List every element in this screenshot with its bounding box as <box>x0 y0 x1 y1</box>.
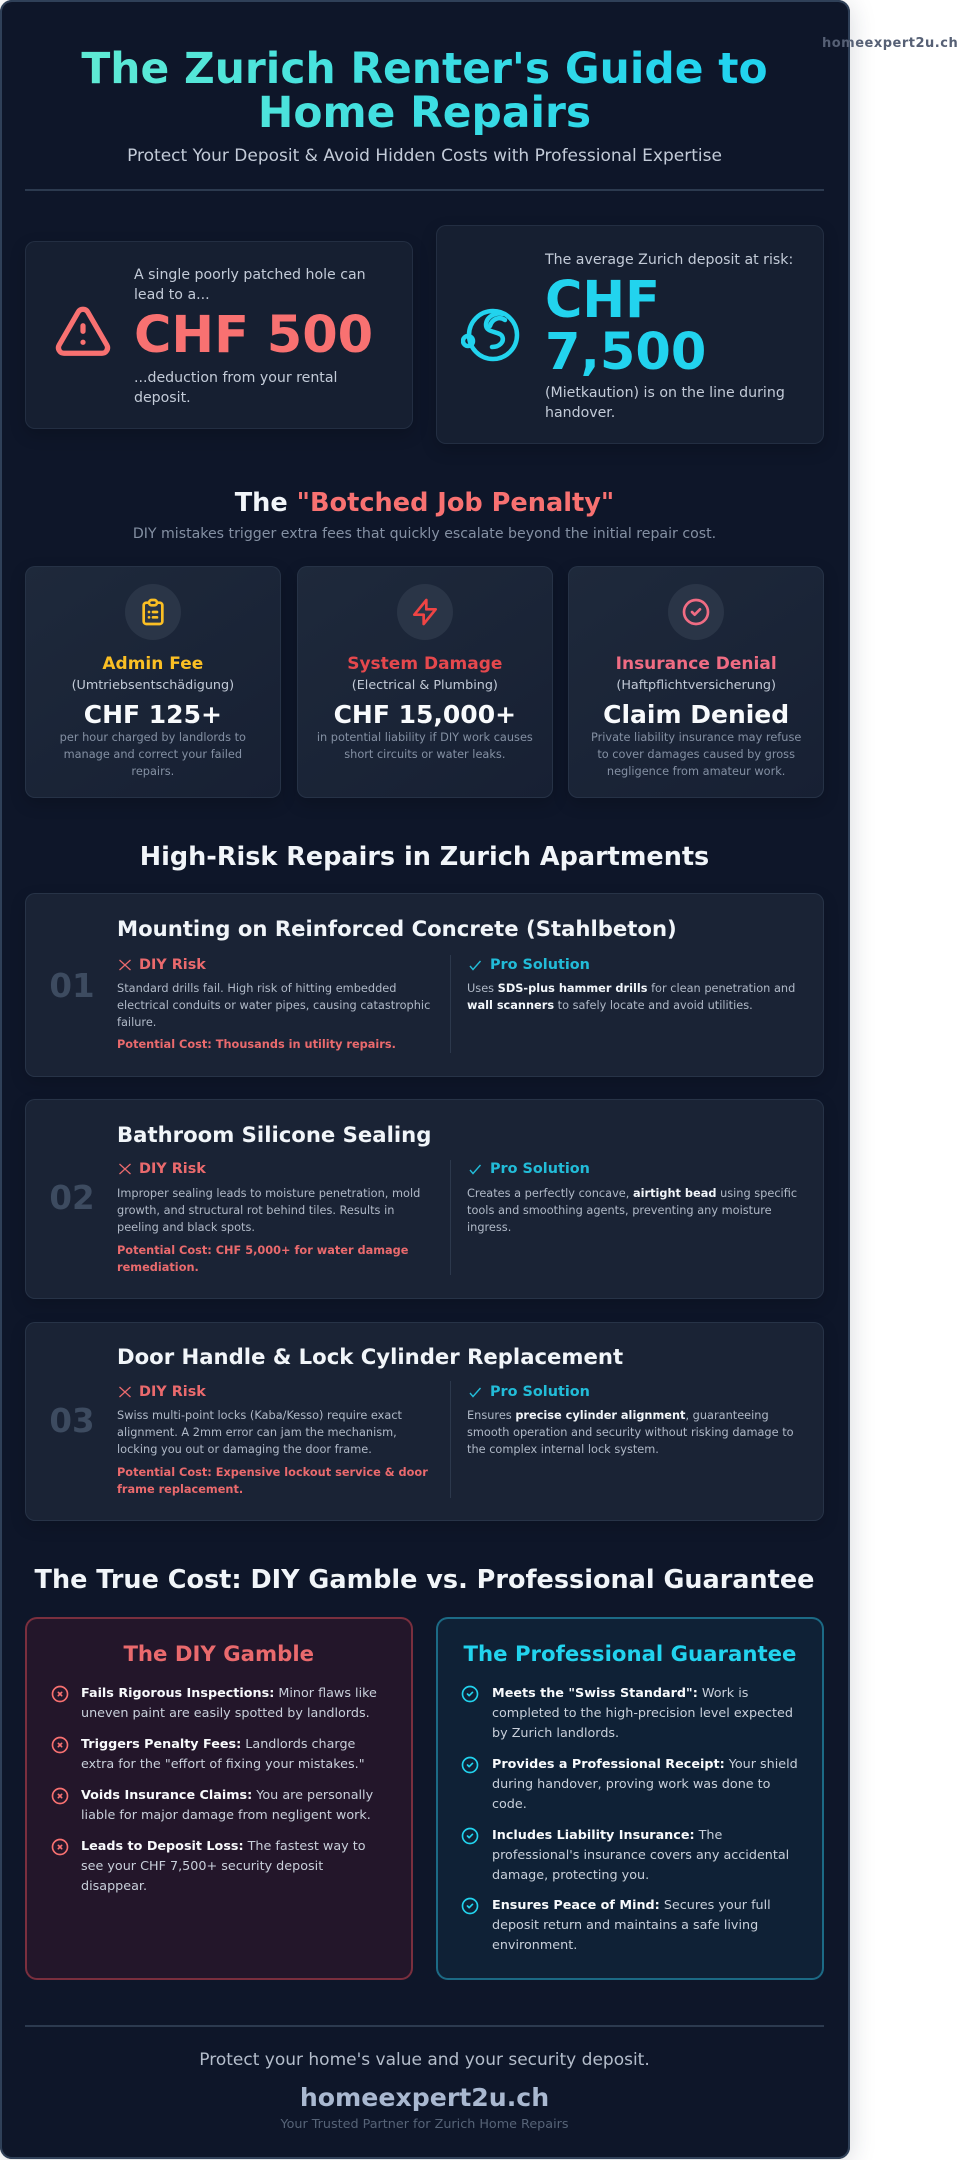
card description: short circuits or water leaks. <box>344 746 505 760</box>
card title: Insurance Denial <box>616 654 777 674</box>
stat card: CHF 500 deduction <box>25 241 412 429</box>
heading: high-risk repairs: High-Risk Repairs in Zurich Apartments <box>140 842 709 872</box>
pro solution text <box>467 1408 794 1456</box>
watermark: homeexpert2u.ch <box>822 36 958 51</box>
icon: warning triangle <box>56 306 110 356</box>
title <box>25 47 824 135</box>
stat caption: (Mietkaution) is on the line during <box>545 385 785 401</box>
icon: x circle <box>52 1838 68 1856</box>
DIY risk text <box>117 1186 420 1234</box>
list item: Leads to Deposit Loss: The fastest way to <box>81 1839 366 1854</box>
repair title: Mounting on Reinforced Concrete (Stahlbeton) <box>117 916 677 941</box>
potential cost: frame replacement. <box>117 1482 243 1496</box>
stat caption <box>134 370 337 406</box>
title: Home Repairs <box>258 88 591 137</box>
subtitle: Protect Your Deposit & Avoid Hidden Costs with Professional Expertise <box>127 146 722 166</box>
DIY risk text: Improper sealing leads to moisture penetration, mold <box>117 1186 420 1200</box>
list item: liable for major damage from negligent work. <box>81 1808 371 1823</box>
list item <box>492 1686 793 1741</box>
list item: extra for the "effort of fixing your mistakes." <box>81 1757 365 1772</box>
panel: the DIY gamble <box>25 1617 412 1980</box>
list item: Ensures Peace of Mind: Secures your full <box>492 1898 771 1913</box>
icon: check circle <box>462 1686 478 1702</box>
card value: CHF 15,000+ <box>334 700 516 729</box>
card description <box>60 730 246 778</box>
icon: dollar coin <box>461 308 520 362</box>
list item: disappear. <box>81 1879 147 1894</box>
card description: per hour charged by landlords to <box>60 730 246 744</box>
potential cost: Potential Cost: CHF 5,000+ for water damage <box>117 1242 408 1256</box>
DIY risk text <box>117 980 430 1028</box>
list item: Includes Liability Insurance: The <box>492 1828 722 1843</box>
pro solution label: Pro Solution <box>490 1161 590 1177</box>
DIY risk text: peeling and black spots. <box>117 1220 255 1234</box>
pro solution text: Uses SDS-plus hammer drills for clean penetration and <box>467 980 795 994</box>
potential cost: Potential Cost: Thousands in utility repairs. <box>117 1036 396 1050</box>
stat caption: handover. <box>545 405 615 421</box>
penalty card: admin fee <box>25 566 281 798</box>
list item: by Zurich landlords. <box>492 1726 619 1741</box>
pro solution text: Creates a perfectly concave, airtight bead using specific <box>467 1186 797 1200</box>
pro solution text: wall scanners to safely locate and avoid utilities. <box>467 998 753 1012</box>
icon: check circle <box>462 1756 478 1774</box>
repair title: Bathroom Silicone Sealing <box>117 1122 431 1147</box>
DIY risk text: alignment. A 2mm error can jam the mechanism, <box>117 1424 397 1438</box>
card title: Admin Fee <box>102 654 203 674</box>
column title: The DIY Gamble <box>123 1642 314 1667</box>
list item <box>492 1757 798 1812</box>
heading: botched job penalty: The "Botched Job Penalty" <box>235 488 614 518</box>
DIY risk text: failure. <box>117 1014 156 1028</box>
list item <box>492 1828 789 1883</box>
footer tagline: Your Trusted Partner for Zurich Home Repairs <box>280 2117 569 2132</box>
stat lead-in text: The average Zurich deposit at risk: <box>545 252 793 268</box>
column title: The Professional Guarantee <box>464 1642 796 1667</box>
icon: x circle <box>52 1736 68 1754</box>
icon: check circle <box>668 584 724 640</box>
list item <box>492 1898 771 1953</box>
list item <box>81 1788 373 1823</box>
icon: clipboard <box>125 584 181 640</box>
section intro: DIY mistakes trigger extra fees that quickly escalate beyond the initial repair cost. <box>133 526 716 542</box>
list item: during handover, proving work was done to <box>492 1777 770 1792</box>
list item: Meets the "Swiss Standard": Work is <box>492 1686 748 1701</box>
DIY risk text <box>117 1408 402 1456</box>
number: 03 <box>49 1402 95 1440</box>
potential cost: remediation. <box>117 1260 199 1274</box>
card subtitle: (Haftpflichtversicherung) <box>616 678 776 693</box>
card description: Private liability insurance may refuse <box>591 730 801 744</box>
pro solution text <box>467 980 795 1012</box>
pro solution text: Ensures precise cylinder alignment, guaranteeing <box>467 1408 769 1422</box>
DIY risk text: Swiss multi-point locks (Kaba/Kesso) require exact <box>117 1408 402 1422</box>
card subtitle: (Electrical & Plumbing) <box>352 678 498 693</box>
card description <box>317 730 533 760</box>
list item <box>81 1737 365 1772</box>
DIY risk text: Standard drills fail. High risk of hitting embedded <box>117 980 396 994</box>
pro solution label: Pro Solution <box>490 1384 590 1400</box>
DIY risk text: electrical conduits or water pipes, causing catastrophic <box>117 998 430 1012</box>
DIY risk text: growth, and structural rot behind tiles. Results in <box>117 1202 394 1216</box>
stat value <box>545 271 706 382</box>
list item <box>81 1686 377 1721</box>
penalty card: insurance denial <box>568 566 824 798</box>
icon: check circle <box>462 1898 478 1914</box>
potential cost <box>117 1464 428 1496</box>
footer brand: homeexpert2u.ch <box>300 2083 549 2112</box>
list item: Fails Rigorous Inspections: Minor flaws like <box>81 1686 377 1701</box>
list item: code. <box>492 1797 527 1812</box>
stat value: 7,500 <box>545 322 706 382</box>
penalty card: system damage <box>297 566 553 798</box>
stat caption: deposit. <box>134 390 191 406</box>
heading: true cost: The True Cost: DIY Gamble vs. Professional Guarantee <box>35 1565 814 1595</box>
number: 02 <box>49 1179 95 1217</box>
pro solution text: the complex internal lock system. <box>467 1442 659 1456</box>
icon: lightning bolt <box>397 584 453 640</box>
list item: Triggers Penalty Fees: Landlords charge <box>81 1737 355 1752</box>
icon: check circle <box>462 1828 478 1844</box>
list item: Provides a Professional Receipt: Your shield <box>492 1757 798 1772</box>
DIY risk label: DIY Risk <box>139 1161 206 1177</box>
stat lead-in text: lead to a... <box>134 287 210 303</box>
list item: uneven paint are easily spotted by landlords. <box>81 1706 370 1721</box>
number: 01 <box>49 967 95 1005</box>
pro solution text <box>467 1186 797 1234</box>
footer message: Protect your home's value and your security deposit. <box>199 2050 650 2070</box>
title: The Zurich Renter's Guide to <box>81 44 768 93</box>
DIY risk text: locking you out or damaging the door frame. <box>117 1442 372 1456</box>
repair title: Door Handle & Lock Cylinder Replacement <box>117 1344 623 1369</box>
stat lead-in text: A single poorly patched hole can <box>134 267 366 283</box>
card subtitle: (Umtriebsentschädigung) <box>72 678 234 693</box>
card value: CHF 125+ <box>84 700 222 729</box>
potential cost: Potential Cost: Expensive lockout service & door <box>117 1464 428 1478</box>
stat value: CHF <box>545 271 660 330</box>
list item: professional's insurance covers any accidental <box>492 1848 789 1863</box>
DIY risk label: DIY Risk <box>139 957 206 973</box>
card description: manage and correct your failed <box>64 746 242 760</box>
panel: the professional guarantee <box>436 1617 824 1980</box>
list item: deposit return and maintains a safe living <box>492 1918 758 1933</box>
list item: see your CHF 7,500+ security deposit <box>81 1859 323 1874</box>
card description: in potential liability if DIY work causes <box>317 730 533 744</box>
stat value: CHF 500 <box>134 306 373 365</box>
list item: environment. <box>492 1938 577 1953</box>
list item: damage, protecting you. <box>492 1868 649 1883</box>
card description <box>591 730 801 778</box>
pro solution text: tools and smoothing agents, preventing any moisture <box>467 1202 772 1216</box>
repair card 02 <box>25 1099 824 1299</box>
stat lead-in text <box>134 267 366 303</box>
repair card 01 <box>25 893 824 1077</box>
potential cost <box>117 1242 408 1274</box>
DIY risk label: DIY Risk <box>139 1384 206 1400</box>
pro solution label: Pro Solution <box>490 957 590 973</box>
pro solution text: ingress. <box>467 1220 511 1234</box>
repair card 03 <box>25 1322 824 1521</box>
card description: to cover damages caused by gross <box>597 746 795 760</box>
card value: Claim Denied <box>603 700 789 729</box>
card title: System Damage <box>347 654 502 674</box>
stat caption: ...deduction from your rental <box>134 370 337 386</box>
icon: x circle <box>52 1788 68 1804</box>
list item: completed to the high-precision level expected <box>492 1706 793 1721</box>
list item <box>81 1839 366 1894</box>
stat caption <box>545 385 785 421</box>
card description: negligence from amateur work. <box>607 764 785 778</box>
card description: repairs. <box>131 764 174 778</box>
pro solution text: smooth operation and security without risking damage to <box>467 1424 794 1438</box>
icon: x circle <box>52 1686 68 1702</box>
stat card: CHF 7,500 deposit <box>436 225 824 444</box>
list item: Voids Insurance Claims: You are personally <box>81 1788 373 1803</box>
